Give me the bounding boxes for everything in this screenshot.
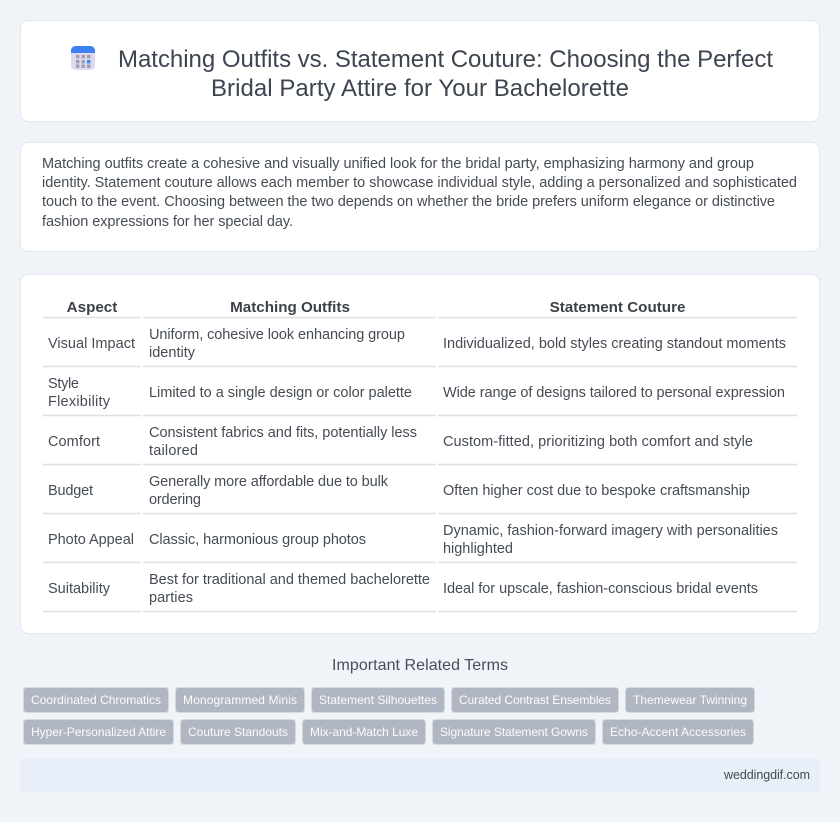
tags: related terms: Hyper-Personalized Attire: [31, 725, 166, 739]
row: suitability: [48, 572, 758, 606]
row: style flexibility: Limited to a single design or color palette: [149, 385, 412, 401]
panel: comparison table: [20, 274, 820, 634]
heading: important related terms: Important Related Terms: [332, 657, 508, 674]
tags: related terms: Signature Statement Gowns: [440, 725, 588, 739]
row: visual impact: Uniform, cohesive look enhancing group: [149, 327, 405, 343]
row: suitability: Best for traditional and themed bachelorette: [149, 572, 430, 588]
row: photo appeal: highlighted: [443, 541, 513, 557]
tags: related terms: Coordinated Chromatics: [31, 693, 161, 707]
table header: Aspect: [67, 299, 117, 316]
title: [118, 46, 773, 102]
tags: related terms: Echo-Accent Accessories: [610, 725, 746, 739]
row: style flexibility: [48, 376, 785, 410]
text block: introduction: fashion expressions for her special day.: [42, 214, 293, 230]
title: Matching Outfits vs. Statement Couture: Choosing the Perfect: [118, 46, 773, 73]
row: comfort: Consistent fabrics and fits, potentially less: [149, 425, 417, 441]
row: suitability: Ideal for upscale, fashion-conscious bridal events: [443, 581, 758, 597]
footer: [20, 758, 820, 792]
footer: weddingdif.com: [723, 768, 810, 782]
icon: calendar: [71, 46, 95, 70]
tags: related terms: Statement Silhouettes: [319, 693, 437, 707]
row: visual impact: [48, 327, 786, 361]
tags: related terms: Monogrammed Minis: [183, 693, 297, 707]
row: visual impact: Visual Impact: [48, 336, 135, 352]
row: suitability: parties: [149, 590, 193, 606]
row: photo appeal: Dynamic, fashion-forward imagery with personalities: [443, 523, 778, 539]
row: comfort: tailored: [149, 443, 198, 459]
tags: related terms: Themewear Twinning: [633, 693, 747, 707]
row: budget: ordering: [149, 492, 201, 508]
row: visual impact: Individualized, bold styles creating standout moments: [443, 336, 786, 352]
row: photo appeal: Classic, harmonious group photos: [149, 532, 366, 548]
tags: related terms: Mix-and-Match Luxe: [310, 725, 418, 739]
panel: introduction: [20, 142, 820, 252]
text block: introduction: Matching outfits create a cohesive and visually unified look for the bridal party, emphasizing harmony and group: [42, 156, 754, 172]
title: Bridal Party Attire for Your Bachelorette: [211, 75, 629, 102]
row: comfort: Comfort: [48, 434, 100, 450]
row: style flexibility: Wide range of designs tailored to personal expression: [443, 385, 785, 401]
row: visual impact: identity: [149, 345, 196, 361]
text block: introduction: touch to the event. Choosing between the two depends on whether the bride prefers uniform elegance or distinctive: [42, 194, 775, 210]
row: style flexibility: Flexibility: [48, 394, 111, 410]
text block: introduction: identity. Statement couture allows each member to showcase individual style, adding a personalized and sophisticated: [42, 175, 797, 191]
text block: introduction: [42, 156, 797, 230]
row: suitability: Suitability: [48, 581, 111, 597]
row: photo appeal: [48, 523, 778, 557]
table header: Statement Couture: [550, 299, 685, 316]
row: style flexibility: Style: [48, 376, 79, 392]
row: budget: Often higher cost due to bespoke craftsmanship: [443, 483, 750, 499]
row: comfort: [48, 425, 753, 459]
row: budget: Budget: [48, 483, 93, 499]
table header: Matching Outfits: [230, 299, 350, 316]
tags: related terms: Couture Standouts: [188, 725, 288, 739]
row: photo appeal: Photo Appeal: [48, 532, 134, 548]
row: comfort: Custom-fitted, prioritizing both comfort and style: [443, 434, 753, 450]
tags: related terms: Curated Contrast Ensembles: [459, 693, 611, 707]
tags: related terms: [24, 688, 754, 744]
row: budget: Generally more affordable due to bulk: [149, 474, 389, 490]
panel: header: [20, 20, 820, 122]
row: budget: [48, 474, 750, 508]
table header: [67, 299, 685, 316]
